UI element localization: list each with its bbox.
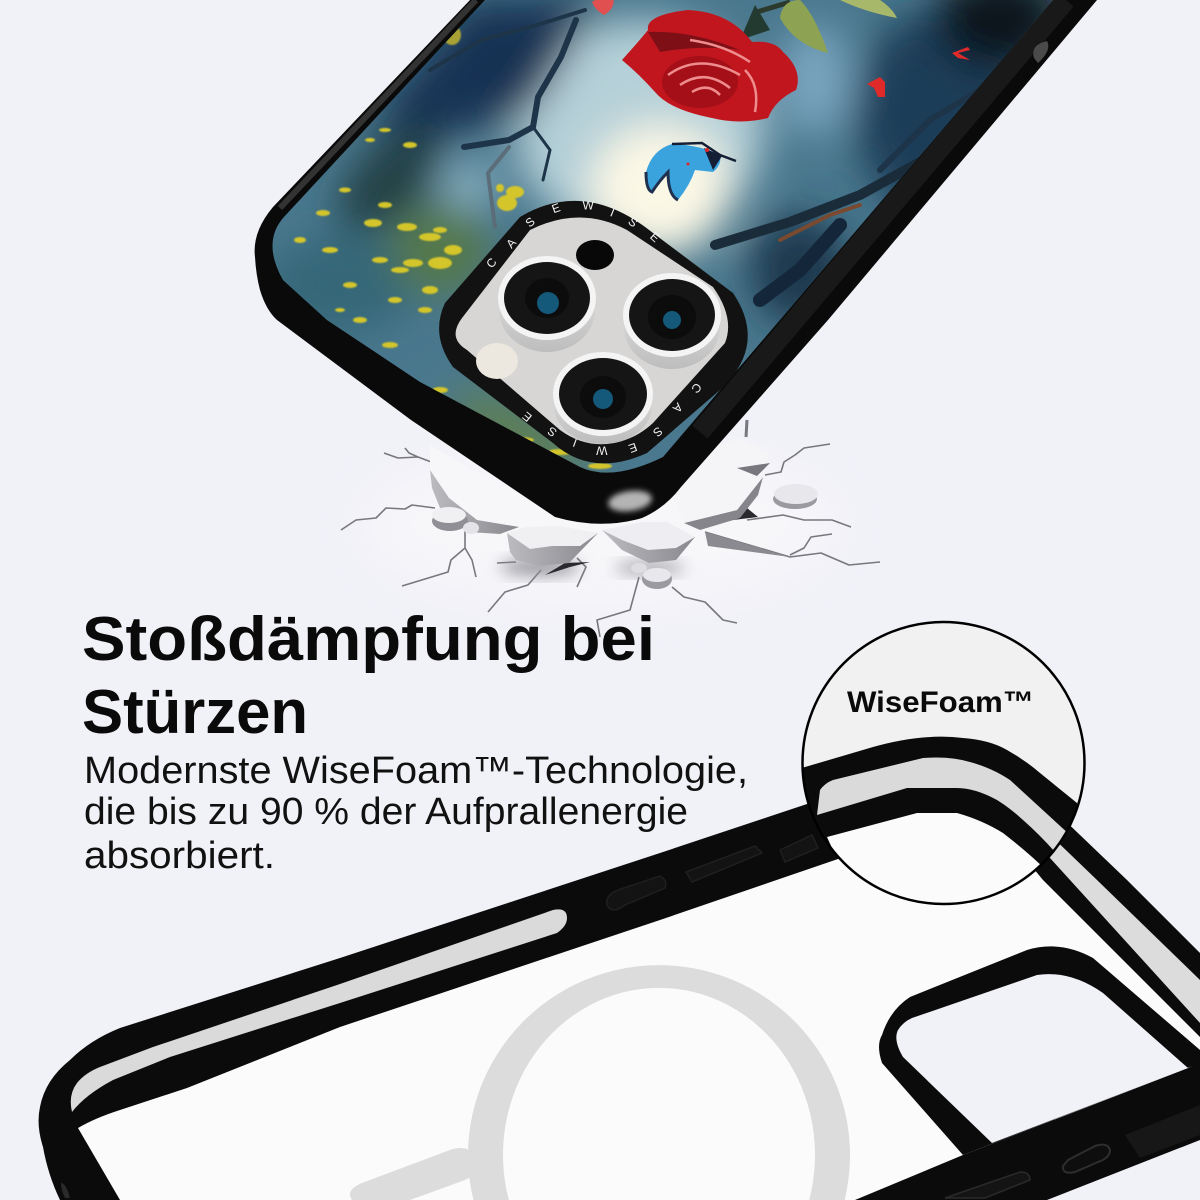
camera cut-out frame — [879, 946, 1200, 1155]
chunk: small bottom pebble — [631, 563, 672, 589]
chunk: small left pebble — [432, 507, 479, 534]
clear back panel — [78, 810, 1200, 1200]
cracked ground impact — [341, 420, 880, 637]
camera cut-out opening — [896, 974, 1188, 1143]
body text — [84, 750, 748, 877]
case corner highlight — [607, 488, 653, 514]
printed artwork — [250, 0, 1065, 494]
tree branches — [430, 10, 980, 300]
top phone with printed case — [250, 0, 1097, 524]
frame outer — [39, 744, 1200, 1200]
chunk: big left slab — [507, 526, 598, 566]
bottom right highlight — [1125, 1105, 1200, 1158]
side buttons — [607, 835, 818, 910]
lens 2 — [623, 273, 721, 369]
body text: Modernste WiseFoam™-Technologie, — [84, 750, 748, 792]
body text: absorbiert. — [84, 835, 275, 877]
brand top: CASEWISE — [483, 198, 663, 271]
yellow foliage — [294, 25, 612, 469]
heading: Stürzen — [82, 678, 308, 747]
bottom phone case, clear back view — [39, 744, 1200, 1200]
flash — [476, 343, 518, 379]
left slot silver band — [71, 909, 567, 1112]
chunk: right pebble — [773, 484, 818, 509]
magnetic ring — [468, 965, 850, 1200]
butterfly — [646, 143, 736, 200]
left side port — [61, 1183, 70, 1198]
case body — [255, 0, 1097, 524]
chunk: upper-left plate — [430, 445, 540, 527]
callout label: WiseFoam™ — [847, 686, 1034, 719]
bottom edge port — [1063, 1145, 1110, 1173]
magnetic alignment pill — [350, 1148, 479, 1200]
case rim left — [280, 0, 476, 208]
rose stem and leaves — [740, 0, 897, 53]
body text: die bis zu 90 % der Aufprallenergie — [84, 791, 688, 833]
camera bumper with branding — [439, 198, 748, 463]
microphone hole — [576, 240, 614, 270]
case side button — [1033, 41, 1048, 63]
heading — [82, 605, 655, 747]
case rim right — [700, 0, 1066, 432]
magnifier callout: WiseFoam — [795, 622, 1095, 910]
right silver band — [1030, 830, 1200, 1023]
bottom edge button — [945, 1172, 1030, 1198]
lens 1 — [498, 256, 596, 352]
brand bottom: CASEWISE — [520, 380, 705, 458]
camera plate — [456, 218, 728, 444]
chunk: right slab — [660, 438, 770, 530]
rose — [622, 10, 798, 122]
lens 3 — [553, 352, 653, 444]
heading: Stoßdämpfung bei — [82, 605, 655, 674]
hearts — [592, 0, 970, 97]
chunk: big right slab — [602, 522, 695, 563]
